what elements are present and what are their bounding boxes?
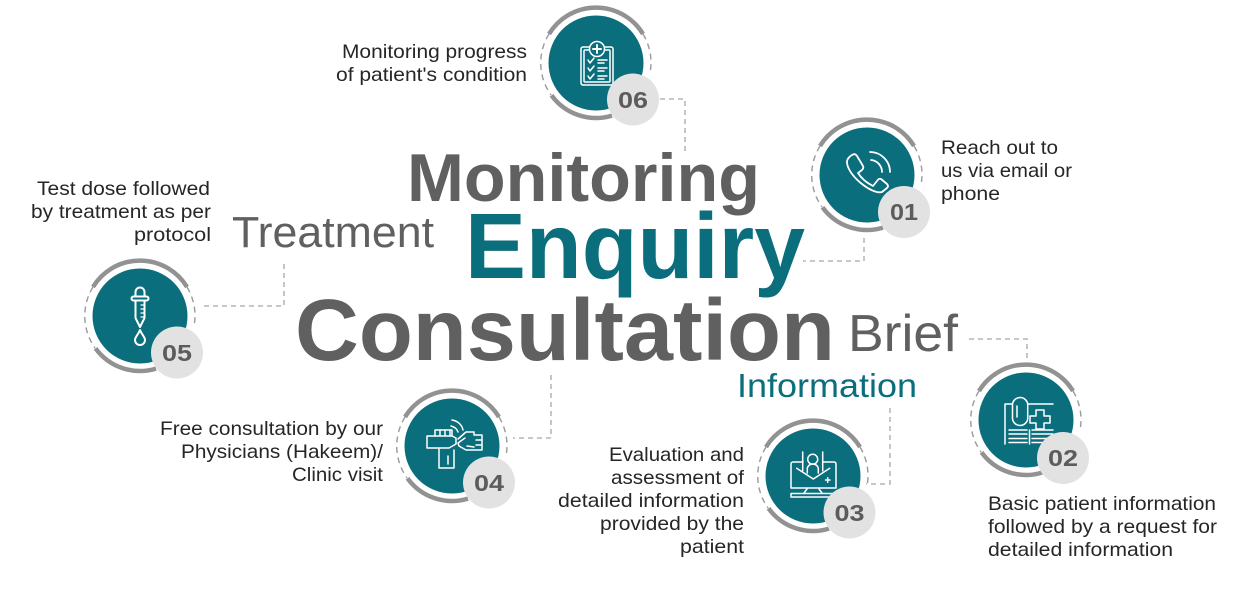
text: step 02 description: detailed information <box>988 539 1173 561</box>
number 05: 05 <box>162 340 192 366</box>
text: step 04 description <box>160 418 384 486</box>
word: Information: Information <box>737 367 917 404</box>
step 04: consultation badge <box>397 391 515 508</box>
text: step 03 description: provided by the <box>600 513 744 535</box>
text: step 01 description <box>941 137 1073 205</box>
number 04: 04 <box>474 470 504 496</box>
word: Brief: Brief <box>848 305 959 363</box>
text: step 03 description: assessment of <box>611 467 745 489</box>
text: step 05 description <box>31 178 212 246</box>
text: step 03 description: detailed information <box>558 490 744 512</box>
text: step 05 description: protocol <box>134 224 211 246</box>
connector 05 <box>202 264 284 306</box>
connector 03 <box>866 408 890 484</box>
text: step 02 description: Basic patient information <box>988 493 1216 515</box>
text: step 04 description: Physicians (Hakeem)/ <box>181 441 384 463</box>
step 05: treatment badge <box>85 261 203 378</box>
icon: paperclip record <box>1005 398 1053 444</box>
number 06: 06 <box>618 87 648 113</box>
text: step 02 description <box>988 493 1218 561</box>
text: step 03 description <box>558 444 745 558</box>
connector 02 <box>969 339 1027 358</box>
word: Treatment: Treatment <box>232 208 434 257</box>
text: step 06 description <box>336 41 527 86</box>
text: step 06 description: Monitoring progress <box>342 41 527 63</box>
number 02: 02 <box>1048 445 1078 471</box>
step 02: brief information badge <box>971 365 1089 484</box>
icon: hands <box>427 420 482 468</box>
text: step 01 description: phone <box>941 183 1000 205</box>
text: step 05 description: by treatment as per <box>31 201 212 223</box>
step 03: evaluation badge <box>758 421 876 538</box>
word: Monitoring: Monitoring <box>407 140 760 216</box>
number 01: 01 <box>890 199 918 225</box>
word: Consultation: Consultation <box>295 282 835 379</box>
text: step 04 description: Clinic visit <box>292 464 384 486</box>
text: step 04 description: Free consultation by our <box>160 418 384 440</box>
connector 04 <box>513 375 551 438</box>
step 01: enquiry badge <box>812 120 930 238</box>
text: step 06 description: of patient's condition <box>336 64 527 86</box>
text: step 05 description: Test dose followed <box>37 178 210 200</box>
connector 06 <box>660 99 685 152</box>
text: step 03 description: patient <box>680 536 745 558</box>
word: Enquiry: Enquiry <box>465 194 805 298</box>
connector 01 <box>803 238 864 261</box>
step 06: monitoring badge <box>541 8 659 125</box>
icon: phone <box>847 152 890 192</box>
icon: monitor with patient <box>791 452 836 497</box>
text: step 01 description: us via email or <box>941 160 1073 182</box>
icon: clipboard <box>581 42 613 85</box>
icon: dropper <box>132 288 148 345</box>
text: step 02 description: followed by a request for <box>988 516 1218 538</box>
text: step 03 description: Evaluation and <box>609 444 744 466</box>
number 03: 03 <box>834 500 864 526</box>
text: step 01 description: Reach out to <box>941 137 1058 159</box>
